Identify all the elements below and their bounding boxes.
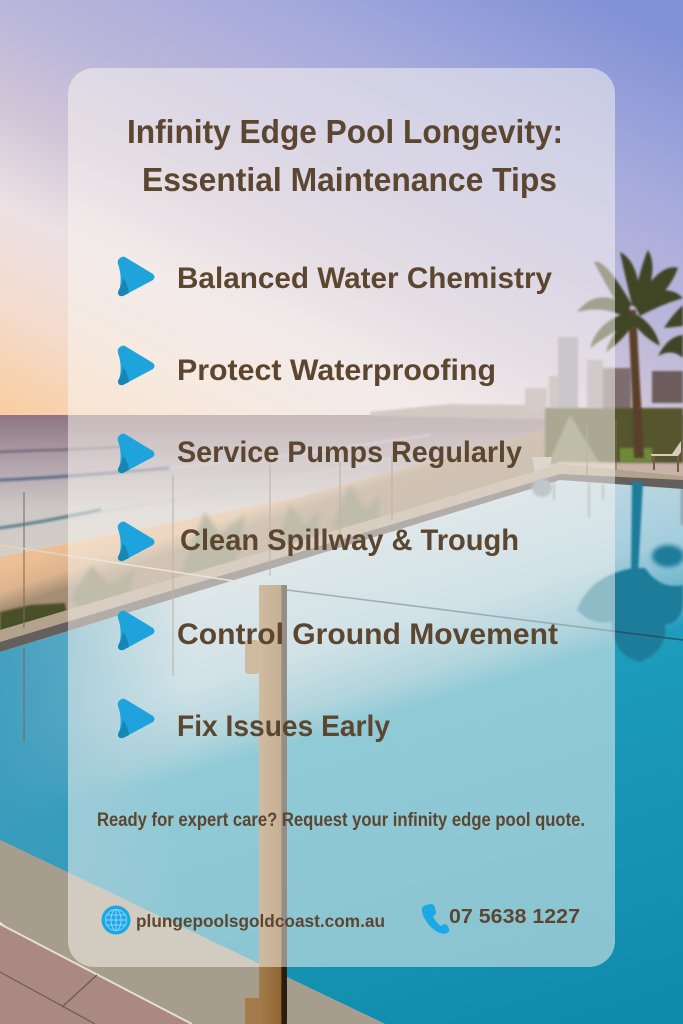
tip 3: service pumps regularly bbox=[118, 434, 522, 473]
glass balustrade lines bbox=[24, 420, 616, 742]
skyline bbox=[370, 337, 683, 420]
title: Infinity Edge Pool Longevity: bbox=[127, 113, 563, 150]
phone contact: 07 5638 1227 bbox=[449, 906, 580, 928]
icon: blue arrow bbox=[118, 611, 154, 650]
beach bbox=[0, 428, 565, 650]
tip 3: service pumps regularly: Service Pumps Regularly bbox=[177, 436, 522, 469]
website contact bbox=[102, 906, 385, 934]
tip 5: control ground movement: Control Ground Movement bbox=[177, 618, 558, 651]
title: Essential Maintenance Tips bbox=[142, 161, 557, 198]
ocean bbox=[0, 415, 683, 600]
pool reflections of balustrade bbox=[554, 480, 682, 525]
tip 4: clean spillway and trough: Clean Spillway & Trough bbox=[180, 524, 519, 557]
tip 1: balanced water chemistry: Balanced Water Chemistry bbox=[177, 262, 552, 295]
tip 2: protect waterproofing bbox=[118, 346, 496, 387]
tip 6: fix issues early bbox=[118, 699, 390, 743]
icon: blue arrow bbox=[118, 346, 154, 385]
foreground shrub bbox=[0, 603, 68, 636]
sky bbox=[0, 0, 683, 416]
icon: phone handset bbox=[422, 904, 449, 934]
icon: blue arrow bbox=[118, 699, 154, 738]
darker water at left of pool bbox=[0, 594, 190, 930]
title bbox=[127, 113, 563, 198]
palm tree bbox=[577, 250, 683, 458]
pool edge band bbox=[0, 464, 683, 654]
translucent content panel bbox=[68, 68, 615, 967]
tip 2: protect waterproofing: Protect Waterproofing bbox=[177, 354, 496, 387]
beach palms bbox=[70, 485, 380, 612]
lounger bbox=[650, 441, 681, 456]
icon: blue arrow bbox=[118, 434, 154, 473]
icon: globe bbox=[102, 906, 130, 934]
icon: blue arrow bbox=[118, 257, 154, 296]
phone contact bbox=[422, 904, 580, 934]
website contact: plungepoolsgoldcoast.com.au bbox=[136, 911, 385, 931]
palm reflection bbox=[577, 482, 683, 662]
glass post bbox=[245, 585, 287, 1024]
call to action: Ready for expert care? Request your infinity edge pool quote. bbox=[97, 809, 585, 831]
icon: blue arrow bbox=[118, 522, 154, 561]
planter reflection bbox=[532, 479, 552, 497]
pink tiles bbox=[0, 924, 192, 1024]
tip 4: clean spillway and trough bbox=[118, 522, 519, 561]
distant trees and terrace bbox=[520, 408, 683, 480]
pool water bbox=[0, 480, 683, 1024]
stone deck bbox=[0, 840, 385, 1024]
planter bbox=[532, 457, 552, 472]
tip 6: fix issues early: Fix Issues Early bbox=[177, 710, 390, 743]
